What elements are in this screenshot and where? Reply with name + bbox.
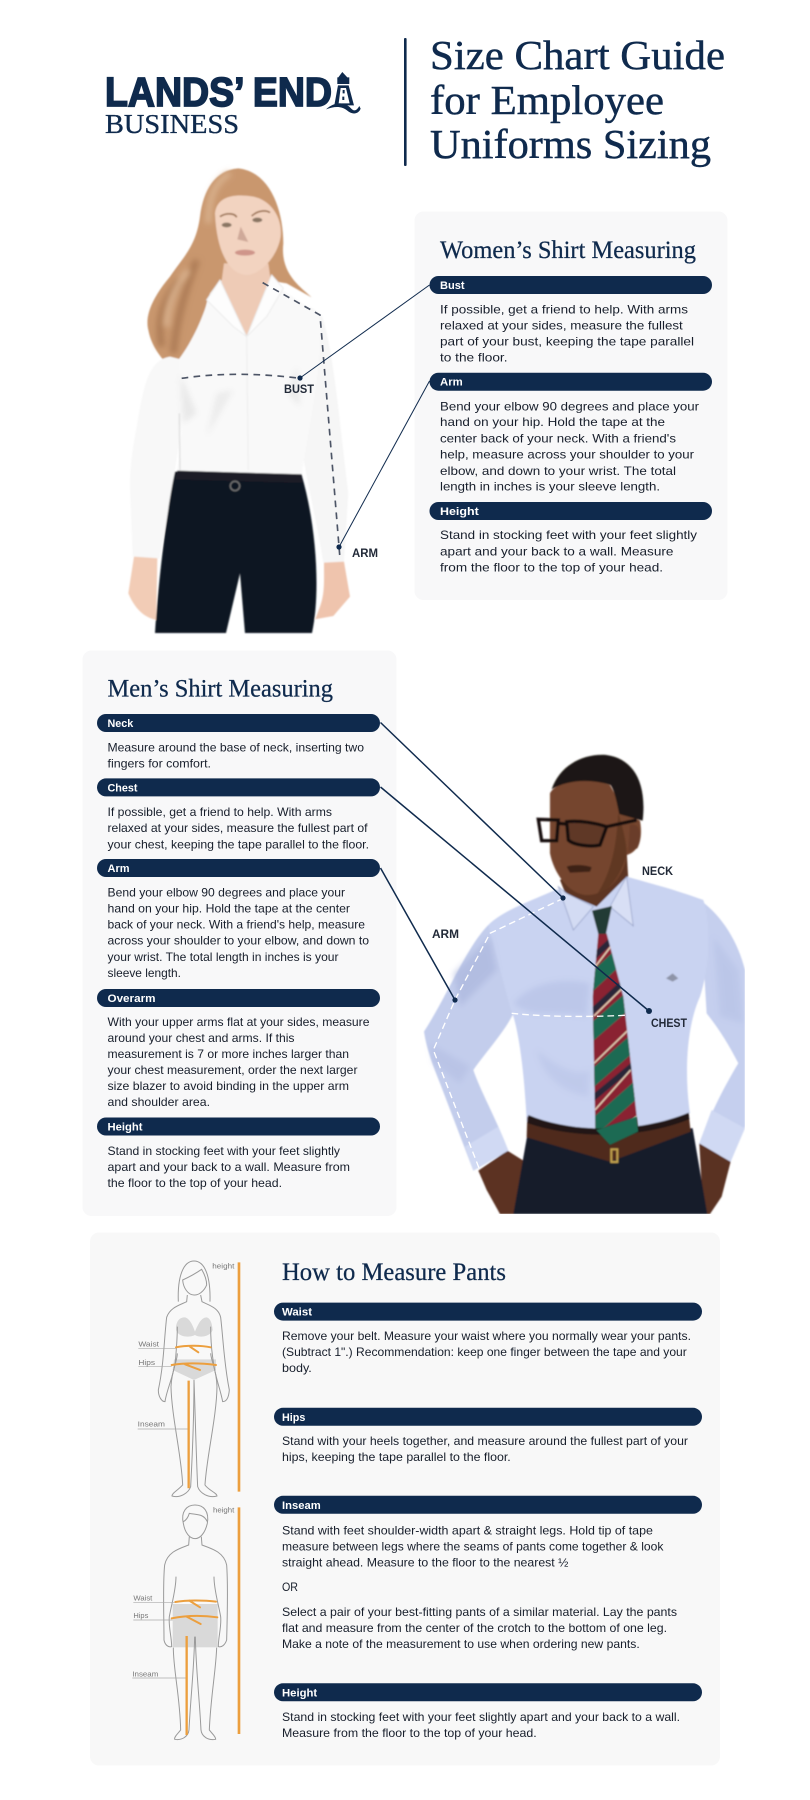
diagram: male body measurements xyxy=(132,1505,239,1740)
section: overarm xyxy=(97,989,380,1109)
section: arm: length in inches is your sleeve length. xyxy=(440,480,660,494)
diagram labels: height xyxy=(213,1508,234,1515)
section: arm: back of your neck. With a friend's help, measure xyxy=(108,918,365,932)
section: inseam: Select a pair of your best-fitting pants of a similar material. Lay the pants xyxy=(282,1605,677,1619)
section: overarm: With your upper arms flat at your sides, measure xyxy=(108,1015,370,1029)
section: overarm: and shoulder area. xyxy=(108,1095,210,1109)
callout: arm line xyxy=(380,868,458,1003)
hands xyxy=(478,1151,525,1214)
photo: woman in white shirt xyxy=(128,168,350,633)
diagram labels: Waist xyxy=(133,1596,152,1603)
title: Uniforms Sizing xyxy=(430,121,711,167)
logo wordmark: LANDS’ END xyxy=(105,69,332,115)
icon: lighthouse xyxy=(326,72,361,114)
section: height: the floor to the top of your head. xyxy=(108,1176,282,1190)
label: arm: ARM xyxy=(352,546,378,560)
diagram labels: Hips xyxy=(133,1613,149,1620)
right arm xyxy=(699,900,745,1162)
section: overarm: size blazer to avoid binding in the upper arm xyxy=(108,1079,349,1093)
section: arm xyxy=(430,373,712,494)
section: arm: hand on your hip. Hold the tape at the xyxy=(440,415,665,429)
section: arm xyxy=(97,859,380,980)
section: arm: center back of your neck. With a friend's xyxy=(440,431,676,445)
section: height: apart and your back to a wall. Measure xyxy=(440,544,674,558)
neck xyxy=(220,263,272,337)
section: arm: Arm xyxy=(440,377,463,389)
neck xyxy=(560,850,628,908)
logo subtitle: BUSINESS xyxy=(105,109,239,139)
section: waist: body. xyxy=(282,1361,312,1375)
section: bust: If possible, get a friend to help. With arms xyxy=(440,302,688,316)
section: height xyxy=(430,502,712,575)
section: bust xyxy=(430,276,712,365)
right cuff xyxy=(699,1110,745,1162)
diagram labels: Inseam xyxy=(138,1422,165,1429)
section: height: Height xyxy=(440,506,479,518)
pants xyxy=(513,1128,707,1214)
section: inseam: Stand with feet shoulder-width apart & straight legs. Hold tip of tape xyxy=(282,1523,653,1537)
section: bust: part of your bust, keeping the tape parallel xyxy=(440,334,694,348)
section: overarm: your chest measurement, order the next larger xyxy=(108,1063,358,1077)
grey shorts xyxy=(173,1604,218,1647)
callout: arm line xyxy=(336,381,430,550)
section: arm: hand on your hip. Hold the tape at the center xyxy=(108,902,350,916)
section: overarm: around your chest and arms. If this xyxy=(108,1031,294,1045)
section: hips: hips, keeping the tape parallel to the floor. xyxy=(282,1450,511,1464)
label: bust: BUST xyxy=(284,382,315,396)
label: arm: ARM xyxy=(432,927,459,941)
face xyxy=(550,780,641,895)
section: arm: Arm xyxy=(108,863,130,875)
section: height: Height xyxy=(108,1122,143,1134)
logo: Lands' End Business xyxy=(105,69,361,139)
tie over belt xyxy=(596,1117,638,1145)
section: overarm: measurement is 7 or more inches larger than xyxy=(108,1047,349,1061)
section: height: apart and your back to a wall. Measure from xyxy=(108,1160,350,1174)
section: bust: Bust xyxy=(440,280,465,292)
section: height: Stand in stocking feet with your feet slightly xyxy=(108,1144,340,1158)
section: hips: Hips xyxy=(282,1412,305,1424)
title xyxy=(430,32,725,167)
collar xyxy=(558,887,593,930)
section: arm: your wrist. The total length in inches is your xyxy=(108,950,338,964)
section: arm: elbow, and down to your wrist. The total xyxy=(440,464,676,478)
diagram labels xyxy=(132,1508,234,1678)
orange tape lines xyxy=(172,1262,239,1492)
shirt body xyxy=(177,275,321,475)
outline xyxy=(138,1261,229,1497)
outline xyxy=(132,1505,227,1740)
diagram labels: Inseam xyxy=(132,1671,159,1678)
orange tape lines xyxy=(172,1507,239,1735)
section: hips: Stand with your heels together, and measure around the fullest part of your xyxy=(282,1434,688,1448)
section: neck: fingers for comfort. xyxy=(108,756,211,770)
section: chest: your chest, keeping the tape parallel to the floor. xyxy=(108,837,369,851)
section: height: Stand in stocking feet with your feet slightly xyxy=(440,528,697,542)
section: arm: Bend your elbow 90 degrees and place your xyxy=(108,886,345,900)
title: Size Chart Guide xyxy=(430,32,725,78)
heading: how to measure pants: How to Measure Pants xyxy=(282,1259,506,1286)
section: bust: relaxed at your sides, measure the fullest xyxy=(440,318,683,332)
grey underwear xyxy=(176,1317,213,1337)
shirt measuring dashes xyxy=(433,898,625,1171)
measuring tape dashes xyxy=(182,283,340,558)
label: neck: NECK xyxy=(642,864,673,878)
section: height xyxy=(97,1118,380,1190)
section: height: Stand in stocking feet with your feet slightly apart and your back to a wall. xyxy=(282,1710,680,1724)
photo: man in blue shirt and tie xyxy=(424,755,745,1214)
panel: women's shirt measuring xyxy=(414,212,728,600)
section: hips xyxy=(274,1408,702,1464)
diagram: female body measurements xyxy=(138,1261,239,1497)
belt xyxy=(175,471,302,483)
hair xyxy=(552,755,643,821)
section: inseam: Make a note of the measurement to use when ordering new pants. xyxy=(282,1637,640,1651)
section: height: Measure from the floor to the top of your head. xyxy=(282,1726,537,1740)
diagram labels: height xyxy=(212,1264,234,1271)
section: height: from the floor to the top of your head. xyxy=(440,561,663,575)
tie xyxy=(592,932,639,1130)
divider line xyxy=(404,38,407,166)
section: neck: Neck xyxy=(108,718,134,730)
panel: men's shirt measuring xyxy=(82,650,396,1216)
right sleeve xyxy=(297,307,348,563)
callout: chest line xyxy=(380,787,652,1014)
face xyxy=(215,196,281,275)
diagram labels: Waist xyxy=(138,1342,159,1349)
section: arm: across your shoulder to your elbow, and down to xyxy=(108,934,369,948)
section: chest: If possible, get a friend to help. With arms xyxy=(108,805,332,819)
hair back xyxy=(147,168,312,367)
section: chest: relaxed at your sides, measure the fullest part of xyxy=(108,821,368,835)
callout: bust line xyxy=(297,285,430,381)
hands xyxy=(128,557,157,620)
section: height: Height xyxy=(282,1687,318,1699)
heading: women's shirt measuring: Women’s Shirt Measuring xyxy=(440,237,696,264)
diagram labels xyxy=(138,1264,234,1429)
diagram labels: Hips xyxy=(138,1360,156,1367)
heading: men's shirt measuring: Men’s Shirt Measuring xyxy=(108,676,333,702)
pants xyxy=(155,472,316,633)
left arm xyxy=(424,925,523,1171)
section: waist: Remove your belt. Measure your waist where you normally wear your pants. xyxy=(282,1329,691,1343)
section: inseam: straight ahead. Measure to the floor to the nearest ½ xyxy=(282,1555,568,1569)
section: chest xyxy=(97,778,380,851)
section: height xyxy=(274,1683,702,1740)
section: inseam: measure between legs where the seams of pants come together & look xyxy=(282,1539,664,1553)
section: inseam xyxy=(274,1496,702,1651)
section: neck xyxy=(97,714,380,770)
section: overarm: Overarm xyxy=(108,993,156,1005)
panel: how to measure pants xyxy=(90,1232,720,1766)
left sleeve xyxy=(130,357,183,559)
section: arm: help, measure across your shoulder to your xyxy=(440,448,694,462)
label: chest: CHEST xyxy=(651,1016,688,1030)
section: waist xyxy=(274,1303,702,1375)
section: arm: Bend your elbow 90 degrees and place your xyxy=(440,399,699,413)
section: inseam: OR xyxy=(282,1580,298,1594)
belt xyxy=(527,1113,691,1162)
title: for Employee xyxy=(430,77,664,123)
section: inseam: flat and measure from the center of the crotch to the bottom of one leg. xyxy=(282,1621,667,1635)
section: inseam: Inseam xyxy=(282,1500,321,1512)
section: waist: Waist xyxy=(282,1307,312,1319)
section: neck: Measure around the base of neck, inserting two xyxy=(108,740,364,754)
glasses xyxy=(538,819,637,846)
section: waist: (Subtract 1".) Recommendation: keep one finger between the tape and your xyxy=(282,1345,687,1359)
torso xyxy=(488,877,709,1130)
section: bust: to the floor. xyxy=(440,351,508,365)
section: chest: Chest xyxy=(108,782,138,794)
left cuff xyxy=(465,1127,508,1171)
pocket logo xyxy=(666,973,678,982)
section: arm: sleeve length. xyxy=(108,966,181,980)
callout: neck line xyxy=(380,722,566,901)
